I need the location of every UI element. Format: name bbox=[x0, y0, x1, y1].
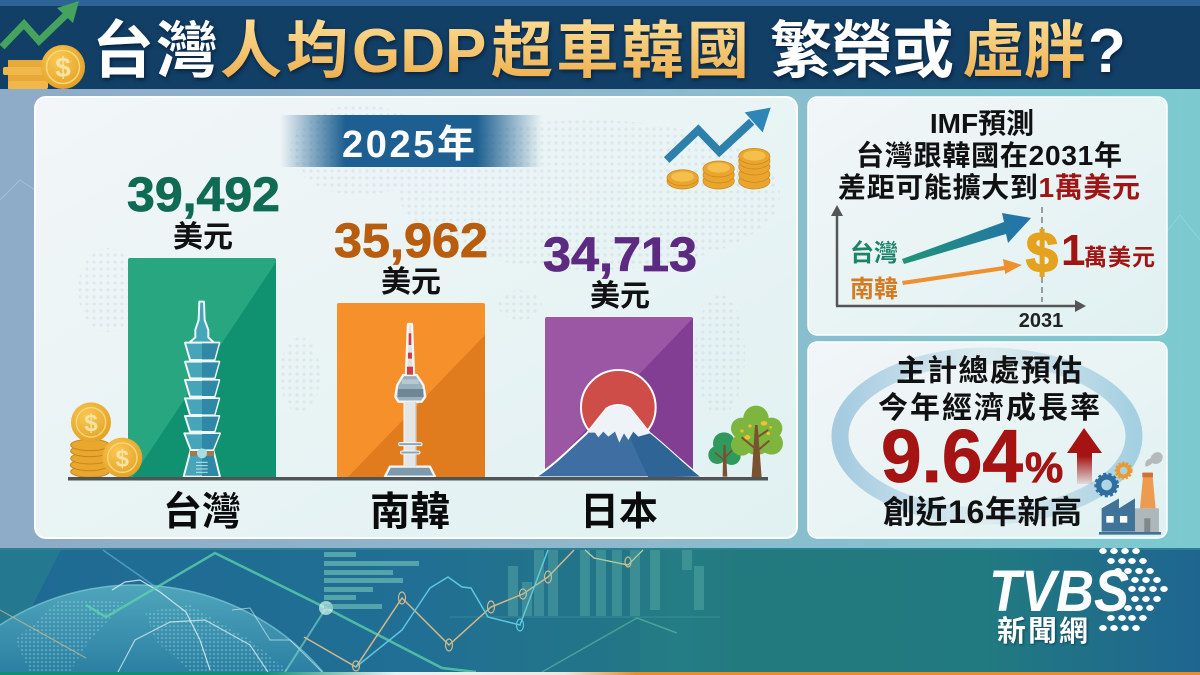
title: ? bbox=[1088, 17, 1126, 86]
icon: Taipei 101 bbox=[184, 302, 220, 477]
DGBAS heading: 今年經濟成長率 bbox=[878, 392, 1100, 425]
year banner bbox=[280, 115, 542, 167]
title: 繁榮或 bbox=[770, 17, 954, 86]
title: 超車韓國 bbox=[491, 17, 749, 86]
bottom background band bbox=[0, 548, 1200, 672]
DGBAS heading bbox=[878, 355, 1100, 425]
decorative ring bbox=[840, 356, 1134, 516]
label: Japan: 日本 bbox=[580, 491, 658, 534]
icon: growth arrow and coins bbox=[2, 1, 85, 89]
TVBS wordmark: TVBS bbox=[989, 559, 1129, 624]
label: South Korea: 南韓 bbox=[370, 490, 450, 534]
news network caption: 新聞網 bbox=[997, 615, 1088, 648]
IMF panel background bbox=[808, 97, 1167, 335]
chart: widening gap bbox=[831, 205, 1155, 332]
DGBAS heading: 主計總處預估 bbox=[896, 355, 1082, 388]
label: Taiwan: 台灣 bbox=[163, 491, 241, 534]
icon: gold coins bbox=[70, 402, 142, 478]
baseline bbox=[68, 477, 768, 480]
growth rate figure: % bbox=[1025, 444, 1063, 492]
value: Japan bbox=[543, 229, 697, 313]
sixteen-year high text: 創近16年新高 bbox=[883, 494, 1082, 530]
chart: widening gap: 1 bbox=[1061, 226, 1085, 275]
value: Taiwan: 39,492 bbox=[127, 169, 280, 222]
background chart lines, right margin bbox=[0, 180, 1200, 240]
bar: Taiwan bbox=[128, 258, 276, 478]
bottom colour strip bbox=[0, 672, 1200, 675]
icon: N Seoul Tower bbox=[385, 324, 435, 477]
title bbox=[92, 17, 1126, 86]
icon: upward arrow with coin stacks bbox=[667, 108, 771, 189]
IMF heading: IMF預測 bbox=[930, 108, 1034, 139]
title band bbox=[0, 6, 1200, 89]
IMF heading bbox=[838, 108, 1140, 203]
DGBAS panel background bbox=[808, 342, 1167, 538]
faint dotted world map bbox=[78, 105, 780, 415]
icon: trees bbox=[708, 406, 783, 477]
value: Taiwan bbox=[127, 169, 280, 254]
top strip bbox=[0, 0, 1200, 7]
panel: DGBAS growth estimate bbox=[808, 342, 1167, 538]
IMF heading: 台灣跟韓國在2031年 bbox=[856, 139, 1122, 171]
icon: gold coins: $ bbox=[84, 410, 98, 437]
value: South Korea bbox=[334, 215, 488, 299]
dot arrow bbox=[1099, 548, 1168, 631]
growth rate figure: 9.64 bbox=[881, 414, 1023, 498]
value: Taiwan: 美元 bbox=[173, 221, 233, 254]
icon: growth arrow and coins: $ bbox=[55, 52, 71, 83]
logo: TVBS news bbox=[989, 548, 1168, 648]
icon: up arrow bbox=[1067, 428, 1102, 484]
chart: widening gap: $ bbox=[1026, 221, 1058, 285]
icon: Mount Fuji and red sun bbox=[535, 370, 702, 477]
value: South Korea: 35,962 bbox=[334, 215, 488, 268]
year banner: 2025年 bbox=[342, 124, 475, 166]
chart: widening gap: 南韓 bbox=[850, 276, 898, 303]
title: 虛胖 bbox=[962, 17, 1086, 86]
value: Japan: 美元 bbox=[590, 280, 650, 313]
value: Japan: 34,713 bbox=[543, 229, 697, 282]
bar: Japan bbox=[540, 317, 693, 478]
icon: gold coins: $ bbox=[116, 445, 129, 472]
panel: IMF forecast bbox=[808, 97, 1167, 335]
value: South Korea: 美元 bbox=[381, 266, 441, 299]
IMF heading: 差距可能擴大到1萬美元 bbox=[838, 172, 1140, 203]
chart: widening gap: 台灣 bbox=[850, 239, 898, 267]
panel background bbox=[35, 97, 797, 538]
chart: widening gap: 萬美元 bbox=[1084, 244, 1155, 270]
chart: widening gap: 2031 bbox=[1019, 310, 1063, 332]
bar: South Korea bbox=[337, 303, 485, 478]
title: GDP bbox=[352, 17, 486, 86]
title: 台灣 bbox=[92, 17, 218, 86]
icon: factory with gears bbox=[1096, 452, 1163, 535]
title: 人均 bbox=[220, 17, 348, 86]
background globe and data lines bbox=[0, 550, 720, 672]
panel: GDP per capita comparison bbox=[35, 97, 797, 538]
